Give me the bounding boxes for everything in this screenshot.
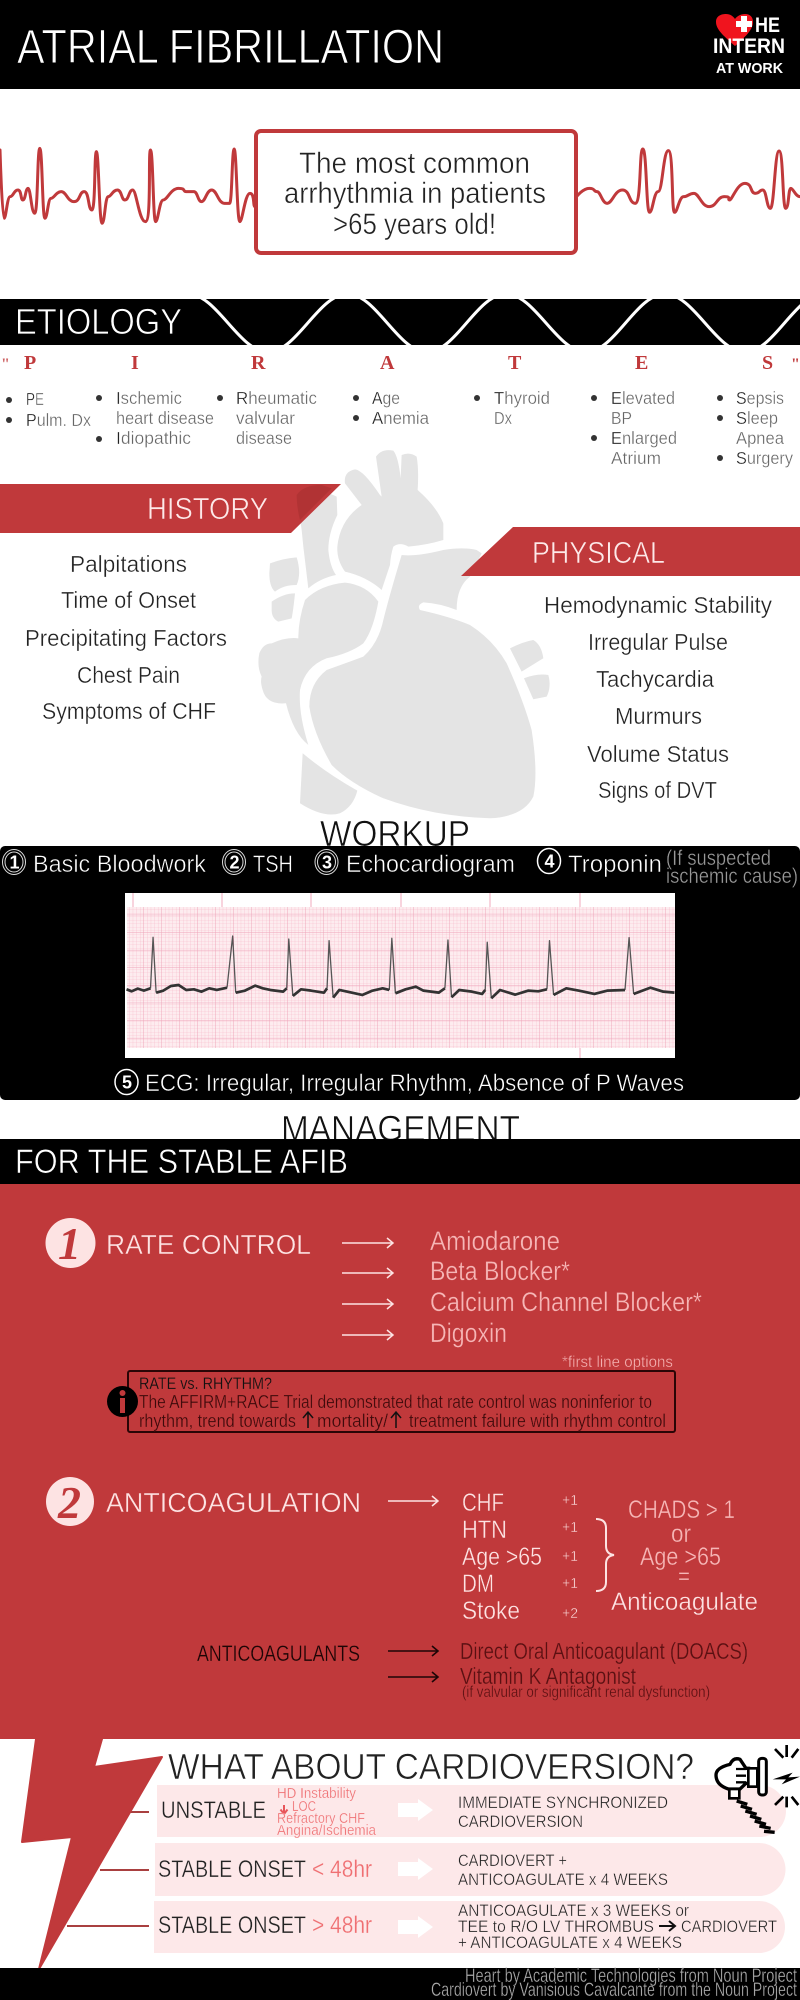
column T: Thyroid [494,388,550,408]
column A: Age [372,388,400,408]
unstable action: IMMEDIATE SYNCHRONIZED [458,1793,668,1812]
CHADS criteria: Stoke [462,1597,520,1625]
etiology lists [6,388,793,468]
rate control drugs: Calcium Channel Blocker* [430,1287,702,1317]
row: stable over 48hr: STABLE ONSET [158,1912,306,1939]
unstable criteria: Angina/Ischemia [277,1822,377,1839]
workup heading: WORKUP [320,813,470,854]
arrow [398,1916,433,1938]
callout: most common arrhythmia: The most common [299,147,530,180]
dark arrows [388,1646,438,1682]
number badge 1: 1 [58,1218,81,1269]
heart illustration [258,450,550,818]
icon: info [107,1386,138,1417]
unstable criteria: HD Instability [277,1785,356,1802]
CHADS points: +1 [562,1519,578,1536]
PIRATES mnemonic letters: " [791,356,800,373]
column I: Idiopathic [116,428,191,448]
column S: Surgery [736,448,793,468]
CHADS criteria [462,1489,542,1625]
history list [25,551,227,724]
number badge 2 [46,1477,94,1528]
step 4: Troponin [568,851,662,878]
action: + ANTICOAGULATE x 4 WEEKS [458,1933,682,1952]
column S: Sepsis [736,388,784,408]
ecg waveform right [577,149,800,212]
column R: disease [236,428,292,448]
physical list: Tachycardia [596,666,714,692]
history list: Symptoms of CHF [42,698,216,724]
stable afib bar: FOR THE STABLE AFIB [15,1143,348,1181]
history banner [0,484,341,533]
physical list: Murmurs [615,703,702,729]
stable afib bar [0,1139,800,1184]
history banner: HISTORY [147,491,268,526]
anticoagulate rule: or [671,1520,691,1548]
history list: Time of Onset [61,587,197,613]
callout: most common arrhythmia: arrhythmia in patients [284,177,546,210]
column R: Rheumatic [236,388,317,408]
rate control heading: RATE CONTROL [106,1229,311,1260]
step 1: 1 [10,852,20,872]
rate vs rhythm box: The AFFIRM+RACE Trial demonstrated that rate control was noninferior to [139,1392,652,1412]
ecg strip [125,893,675,1058]
action: TEE to R/O LV THROMBUS [458,1917,654,1936]
step 2: 2 [230,852,240,872]
PIRATES mnemonic letters: A [380,352,395,374]
number badge 1 [46,1218,96,1269]
PIRATES mnemonic letters [1,352,800,374]
action [458,1851,668,1889]
column R: valvular [236,408,295,428]
PIRATES mnemonic letters: " [1,356,10,373]
anticoagulant options: (if valvular or significant renal dysfunction) [462,1684,710,1701]
footer bar [0,1966,800,2000]
column I [96,388,214,448]
unstable action: CARDIOVERSION [458,1812,583,1831]
PIRATES mnemonic letters: P [24,352,36,374]
rate vs rhythm box: RATE vs. RHYTHM? [139,1374,272,1393]
column A: Anemia [372,408,429,428]
lightning connector lines [67,1812,149,1926]
workup panel [0,846,800,1100]
title: ATRIAL FIBRILLATION [17,21,444,74]
physical list: Volume Status [587,741,729,767]
column S: Sleep [736,408,778,428]
rate control arrows [342,1238,393,1340]
physical list: Irregular Pulse [588,629,728,655]
column P: PE [26,389,44,409]
arrow [398,1858,433,1880]
arrow [398,1799,433,1821]
CHADS points: +1 [562,1492,578,1509]
CHADS points [562,1492,578,1622]
step 5: ECG: Irregular, Irregular Rhythm, Absence of P Waves [145,1070,684,1097]
troponin note: (If suspected [666,847,771,870]
CHADS criteria: DM [462,1570,494,1598]
physical list: Signs of DVT [598,777,717,803]
ecg waveform left [0,148,255,223]
rate control drugs: Amiodarone [430,1226,560,1256]
PIRATES mnemonic letters: S [762,352,773,374]
PIRATES mnemonic letters: T [508,352,522,374]
icon credits [431,1966,798,2000]
row: unstable [161,1785,668,1839]
column A [353,388,429,428]
column S [717,388,793,468]
CHADS points: +1 [562,1575,578,1592]
etiology banner [0,299,800,345]
anticoagulate rule: = [678,1563,690,1589]
anticoagulant options [460,1638,748,1701]
physical list [544,592,772,803]
unstable criteria [277,1785,377,1839]
history list: Chest Pain [77,662,180,688]
unstable action [458,1793,668,1831]
history list: Palpitations [70,551,187,577]
column E: Elevated [611,388,675,408]
row: unstable: UNSTABLE [161,1797,266,1824]
anticoagulants label: ANTICOAGULANTS [197,1641,360,1666]
first line note: *first line options [562,1354,673,1371]
physical list: Hemodynamic Stability [544,592,772,618]
logo: The Intern at Work: AT WORK [716,60,783,77]
logo: The Intern at Work: HE [755,14,780,37]
anticoagulate rule: CHADS > 1 [628,1496,735,1524]
column P: Pulm. Dx [26,410,91,430]
history list: Precipitating Factors [25,625,227,651]
step 5: 5 [122,1072,132,1092]
step 2: TSH [253,851,293,878]
anticoagulate rule: Anticoagulate [611,1588,758,1616]
rate control drugs: Beta Blocker* [430,1256,570,1286]
column I: Ischemic [116,388,182,408]
physical banner: PHYSICAL [532,535,665,570]
column P [6,389,91,430]
row: stable under 48hr [158,1851,668,1889]
column E: BP [611,408,632,428]
action: CARDIOVERT + [458,1851,567,1870]
step 4 [538,848,662,878]
column R [217,388,317,448]
rate vs rhythm box: mortality/ [317,1411,388,1431]
CHADS criteria: CHF [462,1489,504,1517]
action: CARDIOVERT [681,1917,777,1936]
column E: Enlarged [611,428,677,448]
action [458,1901,777,1952]
management heading: MANAGEMENT [281,1108,520,1149]
anticoagulate rule [611,1496,758,1616]
management panel [0,1184,800,1739]
action: ANTICOAGULATE x 3 WEEKS or [458,1901,689,1920]
CHADS criteria: Age >65 [462,1543,542,1571]
callout: most common arrhythmia [256,131,576,253]
row: stable over 48hr: > 48hr [312,1912,372,1939]
logo: The Intern at Work: INTERN [713,35,785,58]
PIRATES mnemonic letters: R [251,352,266,374]
anticoagulate rule: Age >65 [640,1543,721,1571]
unstable criteria: Refractory CHF [277,1810,365,1827]
row: stable under 48hr: < 48hr [312,1856,372,1883]
column E: Atrium [611,448,661,468]
callout: most common arrhythmia: >65 years old! [333,208,496,241]
row: stable under 48hr: STABLE ONSET [158,1856,306,1883]
step 1: Basic Bloodwork [33,851,207,878]
cardioversion section background [0,1739,800,1968]
step 4: 4 [544,852,555,872]
step 3: Echocardiogram [346,851,515,878]
PIRATES mnemonic letters: I [131,352,139,374]
rate control drugs: Digoxin [430,1318,507,1348]
anticoagulant options: Vitamin K Antagonist [460,1663,636,1689]
etiology heading: ETIOLOGY [15,301,182,342]
icon: defibrillator paddle [716,1745,800,1832]
PIRATES mnemonic letters: E [635,352,648,374]
row backgrounds [154,1785,786,1953]
anticoagulation heading: ANTICOAGULATION [106,1487,361,1518]
physical banner [461,527,800,576]
column T [474,388,550,428]
row: stable over 48hr [158,1901,777,1952]
step 2 [222,850,293,878]
rate vs rhythm box [107,1371,675,1432]
header bar [0,0,800,89]
CHADS points: +1 [562,1548,578,1565]
CHADS points: +2 [562,1605,578,1622]
step 3: 3 [322,852,332,872]
anticoagulation arrow [388,1496,438,1506]
logo: The Intern at Work [713,14,785,77]
lightning bolt [22,1739,162,1969]
troponin note [666,847,798,888]
rate control drugs [430,1226,702,1348]
anticoagulation section [46,1477,758,1701]
column T: Dx [494,408,512,428]
column E [591,388,677,468]
brace [596,1519,614,1591]
column S: Apnea [736,428,784,448]
rate control section [46,1218,702,1371]
cardioversion heading: WHAT ABOUT CARDIOVERSION? [168,1746,694,1787]
column I: heart disease [116,408,214,428]
unstable criteria: LOC [292,1798,316,1815]
rate vs rhythm box: rhythm, trend towards [139,1411,296,1431]
number badge 2: 2 [57,1477,81,1528]
action: ANTICOAGULATE x 4 WEEKS [458,1870,668,1889]
rate vs rhythm box: treatment failure with rhythm control [409,1411,666,1431]
CHADS criteria: HTN [462,1516,507,1544]
